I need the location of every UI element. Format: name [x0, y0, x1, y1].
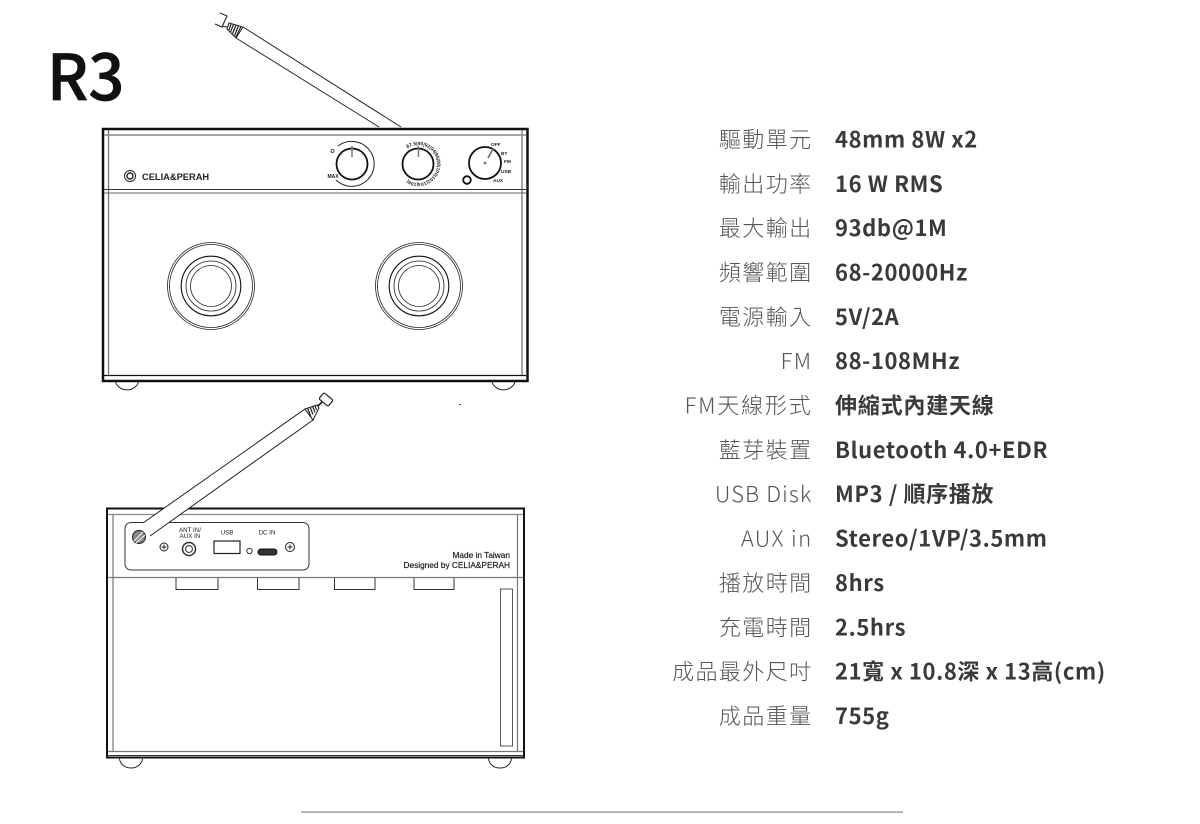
- made in label: Designed by CELIA&PERAH: [403, 560, 510, 570]
- control panel: [125, 522, 309, 570]
- back view radio: [107, 393, 524, 768]
- spec: usb: USB Disk: [715, 477, 812, 509]
- function knob: FM: [504, 159, 511, 165]
- spec: charge time: 2.5hrs: [835, 610, 906, 642]
- right speaker: [376, 242, 462, 330]
- left screw: [160, 543, 168, 551]
- spec: weight: [719, 699, 889, 731]
- spec: aux: [741, 522, 1048, 554]
- antenna base screw: [132, 530, 146, 544]
- icon: back antenna: [143, 393, 333, 536]
- usb-c port: DC IN: [259, 530, 275, 536]
- function knob: [469, 142, 512, 184]
- spec: FM: [781, 344, 960, 376]
- spec: power input: 5V/2A: [835, 300, 900, 332]
- brand logo: CELIA&PERAH: [142, 172, 209, 182]
- spec: power: [719, 167, 943, 199]
- side slot: [500, 589, 512, 746]
- spec: antenna: FM天線形式: [685, 388, 812, 420]
- spec: aux: Stereo/1VP/3.5mm: [835, 522, 1048, 554]
- brand logo: [124, 170, 209, 182]
- usb port: USB: [221, 530, 233, 536]
- spec: dimensions: 成品最外尺吋: [672, 655, 812, 687]
- spec: usb: [715, 477, 994, 509]
- led: [247, 548, 252, 554]
- spec table: [672, 122, 1106, 731]
- front feet: [116, 382, 515, 390]
- usb-c port: [258, 530, 277, 555]
- spec: frequency: 頻響範圍: [719, 256, 812, 288]
- tuning knob: [402, 142, 441, 186]
- function knob: BT: [501, 151, 507, 157]
- left speaker: [168, 242, 254, 330]
- spec: antenna: 伸縮式內建天線: [835, 388, 995, 420]
- spec: driver: [719, 122, 978, 154]
- volume knob: [327, 141, 374, 186]
- spec: dimensions: 21寬 x 10.8深 x 13高(cm): [835, 655, 1106, 687]
- back body: [107, 508, 524, 758]
- spec: max output: [719, 211, 947, 243]
- tabs: [176, 578, 454, 590]
- spec: frequency: [719, 256, 968, 288]
- spec: bluetooth: Bluetooth 4.0+EDR: [835, 433, 1048, 465]
- stray dot: [459, 404, 461, 405]
- icon: front antenna: [215, 13, 401, 127]
- spec: bluetooth: 藍芽裝置: [719, 433, 812, 465]
- spec: power: 輸出功率: [719, 167, 812, 199]
- made in label: Made in Taiwan: [452, 550, 510, 560]
- spec: usb: MP3 / 順序播放: [835, 477, 994, 509]
- spec: play time: 8hrs: [835, 566, 885, 598]
- spec: max output: 93db@1M: [835, 211, 947, 243]
- spec: power: 16 W RMS: [835, 167, 943, 199]
- usb port: [214, 530, 240, 554]
- spec: FM: FM: [781, 344, 812, 376]
- spec: weight: 成品重量: [719, 699, 812, 731]
- function knob: USB: [501, 169, 512, 175]
- spec: frequency: 68-20000Hz: [835, 256, 968, 288]
- aux jack: ANT IN/: [179, 527, 201, 534]
- spec: max output: 最大輸出: [719, 211, 812, 243]
- spec: charge time: 充電時間: [719, 610, 812, 642]
- volume knob: MAX: [327, 174, 339, 180]
- spec: charge time: [719, 610, 906, 642]
- front body: [103, 129, 528, 381]
- spec: bluetooth: [719, 433, 1048, 465]
- spec: FM: 88-108MHz: [835, 344, 960, 376]
- spec: driver: 48mm 8W x2: [835, 122, 978, 154]
- spec: weight: 755g: [835, 699, 889, 731]
- title: R3: [47, 28, 124, 119]
- spec: aux: AUX in: [741, 522, 812, 554]
- back feet: [120, 758, 512, 768]
- function knob: OFF: [491, 142, 501, 148]
- spec: dimensions: [672, 655, 1106, 687]
- spec: driver: 驅動單元: [719, 122, 812, 154]
- made in label: [403, 550, 510, 570]
- front view radio: [102, 12, 529, 390]
- spec: power input: [719, 300, 900, 332]
- spec: antenna: [685, 388, 995, 420]
- spec: power input: 電源輸入: [719, 300, 812, 332]
- indicator ring: [463, 176, 471, 184]
- aux jack: AUX IN: [180, 533, 200, 540]
- tuning knob: 87.5|90|92|94|96|98|100|102|104|106|108: [406, 142, 441, 186]
- function knob: AUX: [493, 178, 504, 184]
- aux jack: [179, 527, 201, 556]
- spec: play time: [719, 566, 885, 598]
- spec: play time: 播放時間: [719, 566, 812, 598]
- bottom rule: [301, 812, 903, 813]
- right screw: [286, 542, 294, 552]
